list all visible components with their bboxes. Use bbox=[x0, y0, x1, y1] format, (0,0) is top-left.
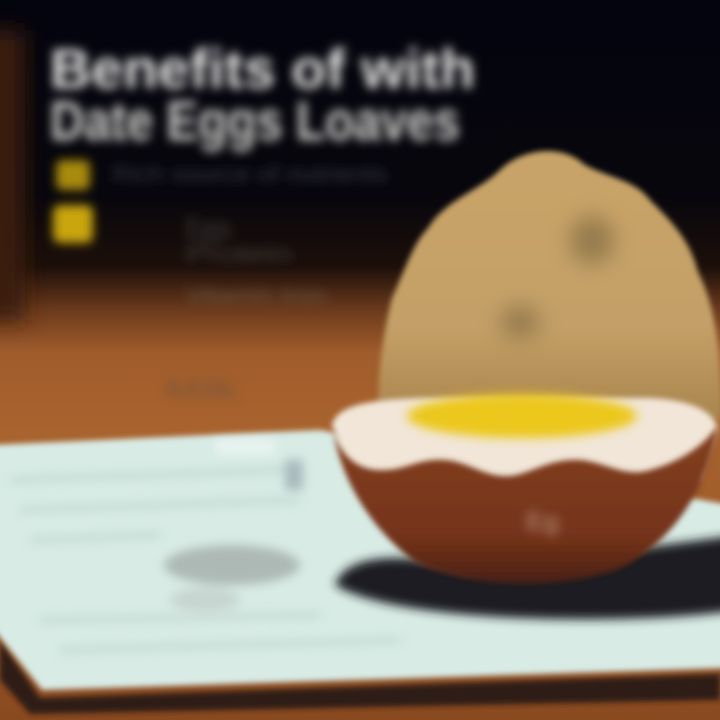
paper text lines bbox=[10, 470, 400, 650]
paper sketch marks bbox=[164, 440, 303, 613]
bowl shadow bbox=[335, 535, 720, 619]
bullet text: Rich source of nutrients bbox=[112, 161, 387, 188]
small text block: Vitamin Iron bbox=[186, 283, 326, 310]
egg speckles bbox=[500, 216, 614, 338]
table caption: Milk bbox=[165, 374, 239, 404]
small text block: Protein bbox=[186, 241, 291, 268]
title: Date Eggs Loaves bbox=[50, 89, 460, 152]
bowl label mark: Eg bbox=[526, 506, 559, 536]
bullet icon: yellow bbox=[53, 205, 93, 243]
egg dome bbox=[378, 151, 720, 420]
bowl bbox=[332, 394, 718, 584]
title bbox=[50, 37, 475, 152]
shadow under paper bbox=[0, 640, 720, 714]
bowl body with scalloped edge bbox=[332, 425, 718, 584]
panel: pale paper sheet bbox=[0, 430, 720, 690]
bullet list bbox=[53, 160, 387, 310]
bullet icon: yellow bbox=[56, 160, 90, 190]
bowl rim white bbox=[332, 398, 718, 480]
small text block: Eggs bbox=[186, 212, 231, 245]
small text block bbox=[186, 212, 326, 310]
egg yolk bbox=[407, 394, 637, 438]
title: Benefits of with bbox=[50, 37, 475, 100]
